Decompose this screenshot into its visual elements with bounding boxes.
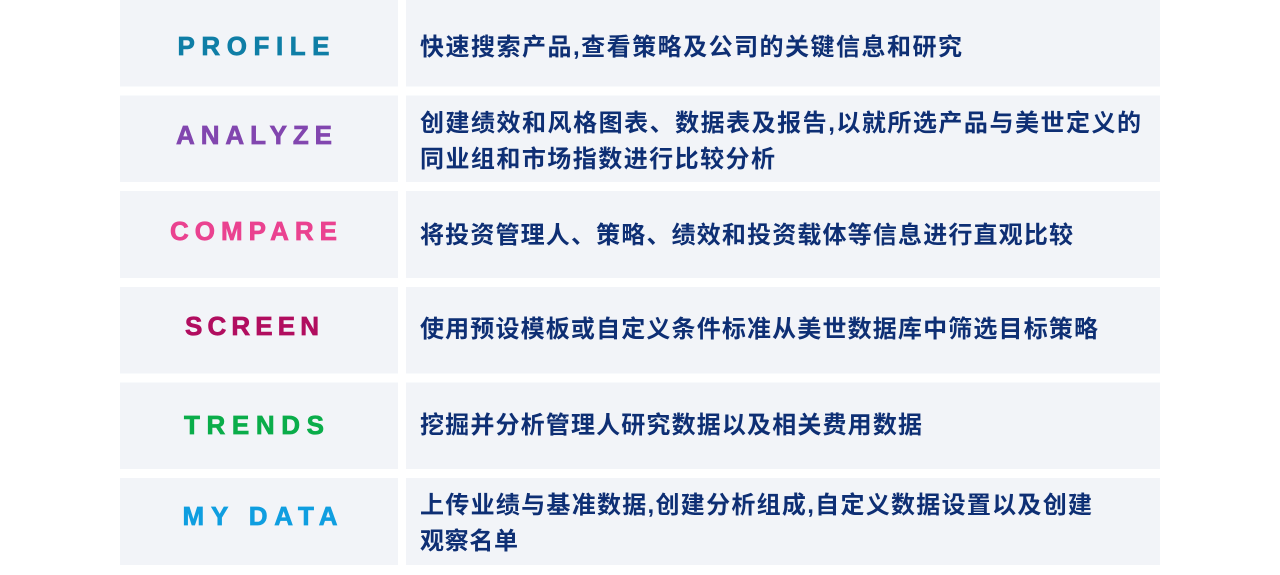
row: SCREEN [120, 287, 1160, 374]
description panel: MY DATA [406, 478, 1160, 565]
label panel: MY DATA [120, 478, 398, 565]
row: COMPARE [120, 191, 1160, 278]
row: ANALYZE [120, 96, 1160, 182]
description panel: ANALYZE [406, 96, 1160, 182]
label: SCREEN: SCREEN [185, 311, 319, 341]
description: SCREEN: 使用预设模板或自定义条件标准从美世数据库中筛选目标策略 [420, 316, 1098, 343]
description: PROFILE: 快速搜索产品,查看策略及公司的关键信息和研究 [420, 34, 962, 61]
label: PROFILE: PROFILE [178, 31, 330, 61]
description panel: COMPARE [406, 191, 1160, 278]
label panel: COMPARE [120, 191, 398, 278]
description: COMPARE: 将投资管理人、策略、绩效和投资载体等信息进行直观比较 [420, 215, 1073, 250]
label: TRENDS: TRENDS [184, 410, 324, 440]
description: MY DATA [420, 492, 1092, 555]
row: PROFILE [120, 0, 1160, 86]
label: MY DATA: MY DATA [182, 501, 338, 531]
label panel: ANALYZE [120, 96, 398, 182]
description panel: SCREEN [406, 287, 1160, 374]
label panel: SCREEN [120, 287, 398, 374]
description: ANALYZE [420, 103, 1141, 173]
row: MY DATA [120, 478, 1160, 565]
description: ANALYZE: 创建绩效和风格图表、数据表及报告,以就所选产品与美世定义的 [420, 103, 1141, 138]
label panel: TRENDS [120, 382, 398, 469]
label panel: PROFILE [120, 0, 398, 86]
description: MY DATA: 观察名单 [420, 528, 518, 555]
label: COMPARE: COMPARE [170, 216, 337, 246]
description: MY DATA: 上传业绩与基准数据,创建分析组成,自定义数据设置以及创建 [420, 492, 1092, 519]
label: ANALYZE: ANALYZE [176, 120, 332, 150]
description: TRENDS: 挖掘并分析管理人研究数据以及相关费用数据 [420, 412, 922, 439]
row: TRENDS [120, 382, 1160, 469]
description: ANALYZE: 同业组和市场指数进行比较分析 [420, 146, 775, 173]
description panel: TRENDS [406, 382, 1160, 469]
description panel: PROFILE [406, 0, 1160, 86]
